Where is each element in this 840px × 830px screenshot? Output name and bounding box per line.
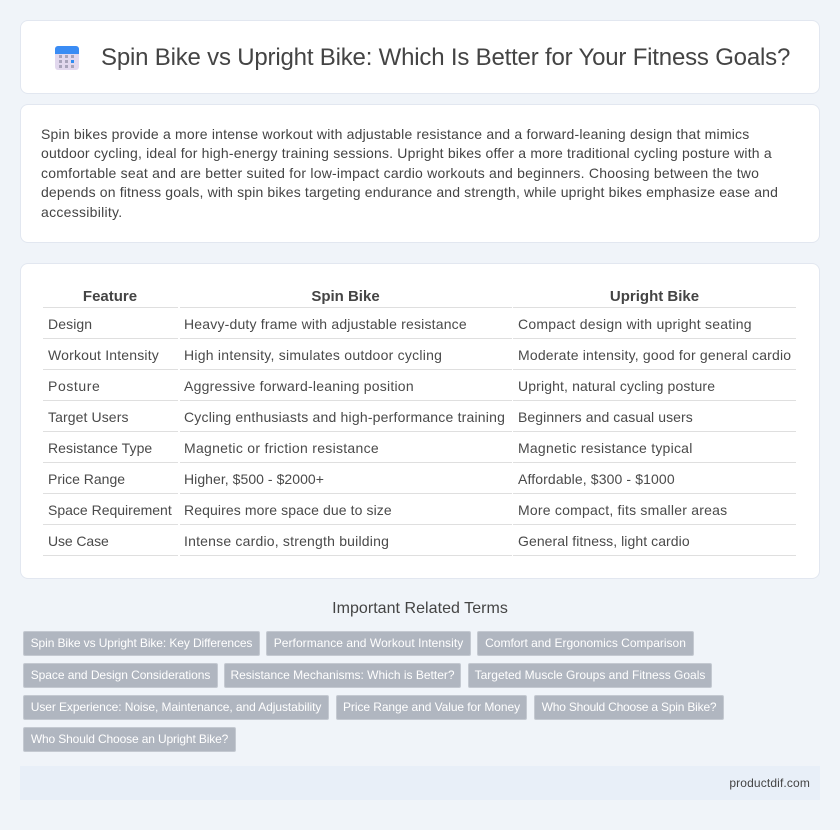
panel: comparison table: General fitness, light cardio (518, 533, 690, 549)
header panel (20, 20, 820, 94)
panel: comparison table: Magnetic or friction resistance (184, 440, 379, 456)
tag: Space and Design Considerations (31, 668, 210, 682)
panel: comparison table: Aggressive forward-leaning position (184, 378, 414, 394)
tag: Targeted Muscle Groups and Fitness Goals (475, 668, 705, 682)
panel: comparison table: High intensity, simulates outdoor cycling (184, 347, 442, 363)
row: Space Requirement: Space Requirement (48, 502, 172, 518)
panel: introduction: comfortable seat and are better suited for low-impact cardio workouts and beginners. Choosing between the two (41, 165, 759, 181)
panel: comparison table: Intense cardio, strength building (184, 533, 389, 549)
row: Target Users: Target Users (48, 409, 129, 425)
panel: comparison table: Cycling enthusiasts and high-performance training (184, 409, 505, 425)
row: Design: Design (48, 316, 92, 332)
title: Spin Bike vs Upright Bike: Which Is Better for Your Fitness Goals? (101, 44, 790, 71)
tag (23, 727, 236, 752)
panel: introduction: Spin bikes provide a more intense workout with adjustable resistance and a forward-leaning design that mimics (41, 126, 749, 142)
tag (23, 663, 218, 688)
tag (266, 631, 471, 656)
icon: calendar (55, 46, 79, 70)
panel: comparison table: Higher, $500 - $2000+ (184, 471, 324, 487)
panel: introduction (20, 104, 820, 243)
row: Posture: Posture (48, 378, 100, 394)
panel: comparison table: Moderate intensity, good for general cardio (518, 347, 791, 363)
tag (534, 695, 724, 720)
row: Price Range: Price Range (48, 471, 125, 487)
tag (477, 631, 694, 656)
tag: Price Range and Value for Money (343, 700, 520, 714)
heading: important related terms: Important Related Terms (332, 600, 508, 617)
panel: comparison table: Affordable, $300 - $1000 (518, 471, 675, 487)
panel: comparison table: Compact design with upright seating (518, 316, 752, 332)
panel: introduction: outdoor cycling, ideal for high-energy training sessions. Upright bikes offer a more traditional cycling posture with a (41, 145, 772, 161)
panel: comparison table: More compact, fits smaller areas (518, 502, 727, 518)
panel: comparison table: Requires more space due to size (184, 502, 392, 518)
tag: User Experience: Noise, Maintenance, and Adjustability (31, 700, 321, 714)
tag: Who Should Choose an Upright Bike? (31, 732, 228, 746)
table header: Feature: Feature (83, 288, 137, 305)
footer source: productdif.com (729, 776, 810, 790)
panel: comparison table: Magnetic resistance typical (518, 440, 693, 456)
panel: introduction: accessibility. (41, 204, 122, 220)
row: Resistance Type: Resistance Type (48, 440, 152, 456)
table header: Spin Bike: Spin Bike (311, 288, 380, 305)
panel: comparison table (20, 263, 820, 579)
panel: introduction: depends on fitness goals, with spin bikes targeting endurance and strength, while upright bikes emphasize ease and (41, 184, 778, 200)
tag: Performance and Workout Intensity (274, 636, 463, 650)
tag: Who Should Choose a Spin Bike? (542, 700, 716, 714)
tag (23, 695, 329, 720)
tag list (23, 631, 724, 752)
tag (23, 631, 260, 656)
tag (224, 663, 461, 688)
panel: comparison table: Beginners and casual users (518, 409, 693, 425)
tag (468, 663, 712, 688)
tag (336, 695, 527, 720)
panel: comparison table: Heavy-duty frame with adjustable resistance (184, 316, 467, 332)
tag: Spin Bike vs Upright Bike: Key Differences (31, 636, 252, 650)
table header: Upright Bike: Upright Bike (610, 288, 699, 305)
row: Workout Intensity: Workout Intensity (48, 347, 159, 363)
row: Use Case: Use Case (48, 533, 109, 549)
tag: Comfort and Ergonomics Comparison (485, 636, 686, 650)
footer bar (20, 766, 820, 800)
tag: Resistance Mechanisms: Which is Better? (230, 668, 455, 682)
panel: comparison table: Upright, natural cycling posture (518, 378, 715, 394)
